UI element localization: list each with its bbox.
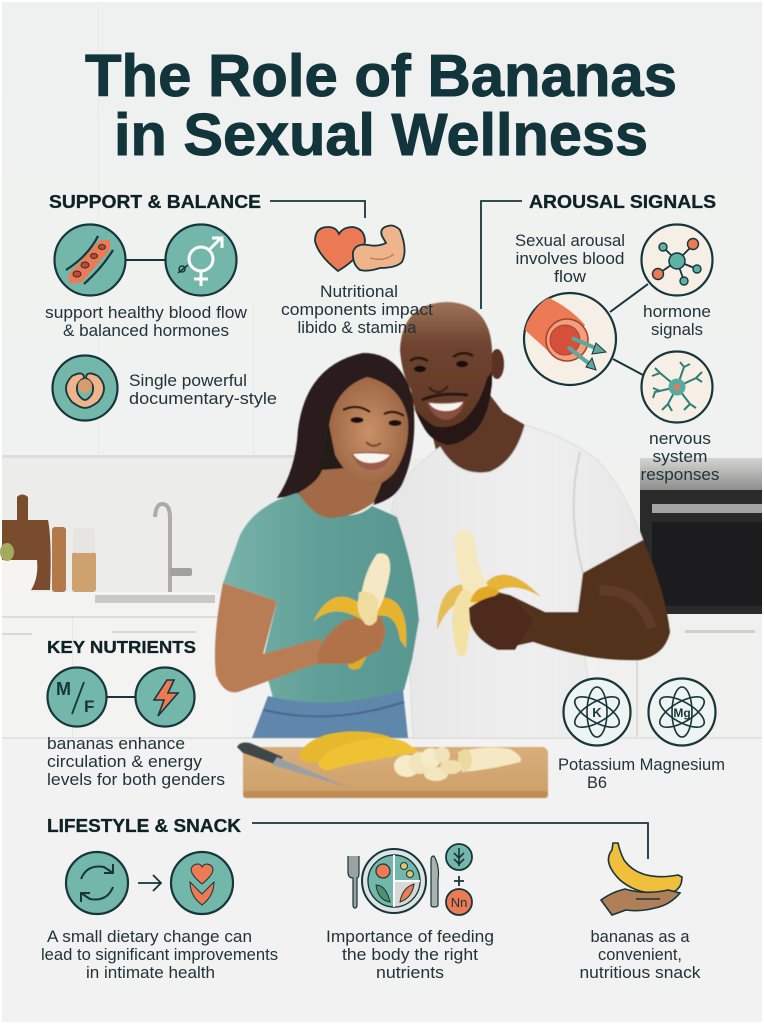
woman hair back <box>277 353 414 503</box>
text: sexual arousal: Sexual arousal <box>515 231 625 250</box>
heading: arousal signals: AROUSAL SIGNALS <box>529 191 716 212</box>
icon: magnesium atom <box>648 678 716 746</box>
cutting board with bananas and knife <box>237 731 548 798</box>
banana held by woman <box>313 553 406 670</box>
text: small dietary change: in intimate health <box>86 963 215 982</box>
text: bananas enhance: circulation & energy <box>47 752 203 771</box>
text: nervous system responses <box>640 429 720 484</box>
panel: key nutrients <box>47 637 725 792</box>
title: in Sexual Wellness <box>114 102 648 168</box>
icon: hormone molecule <box>642 224 712 296</box>
icon: healthy plate <box>348 844 472 915</box>
man arm <box>470 540 670 660</box>
woman jeans <box>252 690 408 738</box>
text: small dietary change: lead to significant improvements <box>41 945 278 964</box>
text: sexual arousal: flow <box>554 267 587 286</box>
photo: couple holding bananas <box>215 302 670 738</box>
banana held by man <box>437 529 541 656</box>
icon: male female <box>48 668 135 726</box>
woman smile <box>351 452 392 470</box>
woman face <box>329 377 408 486</box>
text: feeding the body: the body the right <box>342 945 478 964</box>
man white t-shirt <box>392 425 643 738</box>
text: nutritional components: components impact <box>281 300 433 319</box>
panel: arousal signals <box>481 191 720 484</box>
whole bananas <box>299 731 400 762</box>
text: feeding the body <box>326 927 494 982</box>
icon: heart care <box>171 852 233 914</box>
icon: cycle <box>66 852 128 914</box>
text: nutritional components: libido & stamina <box>298 318 417 337</box>
text: bananas enhance <box>47 734 225 789</box>
icon: neuron <box>642 352 712 422</box>
icon: male female: M <box>56 679 71 699</box>
heading: lifestyle & snack: LIFESTYLE & SNACK <box>47 815 242 836</box>
woman <box>215 353 419 738</box>
icon: lightning bolt <box>136 668 194 726</box>
oven <box>640 458 762 490</box>
text: bananas enhance: levels for both genders <box>47 770 225 789</box>
text: blood flow and hormones <box>45 303 248 340</box>
title: The Role of Bananas <box>85 43 677 109</box>
text: convenient snack: convenient, <box>598 945 682 964</box>
connector: support to nutrition <box>270 201 365 218</box>
text: convenient snack: nutritious snack <box>580 963 701 982</box>
man neck <box>430 395 530 474</box>
board <box>243 747 548 798</box>
heading: key nutrients: KEY NUTRIENTS <box>47 637 196 657</box>
text: small dietary change: A small dietary change can <box>47 927 252 946</box>
icon: male female: F <box>84 697 94 716</box>
woman eyes <box>343 407 404 446</box>
icon: magnesium atom: Mg <box>673 706 691 720</box>
panel: lifestyle & snack <box>41 815 701 982</box>
woman arm <box>215 583 322 692</box>
text: potassium magnesium b6: Potassium Magnesium <box>558 755 725 774</box>
woman neck <box>298 465 385 518</box>
text: small dietary change <box>41 927 278 982</box>
man eyes <box>410 353 473 392</box>
icon: blood vessel <box>54 224 166 296</box>
icon: gender symbols <box>166 224 236 296</box>
text: potassium magnesium b6: B6 <box>587 773 607 792</box>
panel: support & balance <box>45 191 433 420</box>
woman hand <box>317 612 386 664</box>
connector: arousal to couple <box>481 201 522 309</box>
icon: banana in hand <box>601 843 682 915</box>
knife <box>237 742 350 788</box>
man fingers over banana <box>469 595 533 650</box>
icon: artery with blood flow <box>524 293 616 385</box>
man mouth <box>422 394 468 420</box>
icon: potassium atom: K <box>592 705 602 720</box>
text: nervous system responses: nervous <box>649 429 711 448</box>
text: single powerful: Single powerful <box>129 371 247 390</box>
man beard <box>414 372 492 445</box>
text: convenient snack: bananas as a <box>590 927 690 946</box>
man head <box>400 302 492 444</box>
connector: lifestyle to banana <box>252 823 648 859</box>
icon: healthy plate: Nn <box>451 895 467 910</box>
text: feeding the body: Importance of feeding <box>326 927 494 946</box>
icon: heart and muscle <box>315 226 405 271</box>
text: potassium magnesium b6 <box>558 755 725 792</box>
text: single powerful <box>129 371 277 408</box>
text: sexual arousal <box>515 231 625 286</box>
text: bananas enhance: bananas enhance <box>47 734 185 753</box>
text: nervous system responses: responses <box>640 465 720 484</box>
text: blood flow and hormones: & balanced hormones <box>63 321 229 340</box>
man <box>392 302 670 738</box>
text: hormone signals <box>643 302 711 339</box>
text: single powerful: documentary-style <box>129 389 277 408</box>
text: nervous system responses: system <box>652 447 708 466</box>
woman fingers over banana <box>325 627 384 664</box>
icon: potassium atom <box>564 678 630 746</box>
icon: reproductive care <box>52 356 118 420</box>
text: feeding the body: nutrients <box>376 963 444 982</box>
title <box>85 43 677 168</box>
text: nutritional components <box>281 282 433 337</box>
man ear <box>490 349 504 379</box>
woman hair front <box>277 353 414 505</box>
text: convenient snack <box>580 927 701 982</box>
text: blood flow and hormones: support healthy blood flow <box>45 303 248 322</box>
banana slices <box>394 747 521 781</box>
text: hormone signals: hormone <box>643 302 711 321</box>
text: sexual arousal: involves blood <box>516 249 624 268</box>
cutting board decor <box>2 494 51 590</box>
heading: support & balance: SUPPORT & BALANCE <box>49 191 261 212</box>
connectors: vessel to signals <box>610 284 648 375</box>
arrow: change to health <box>138 875 161 891</box>
woman teal t-shirt <box>223 493 419 703</box>
text: hormone signals: signals <box>651 320 703 339</box>
text: nutritional components: Nutritional <box>320 282 398 301</box>
